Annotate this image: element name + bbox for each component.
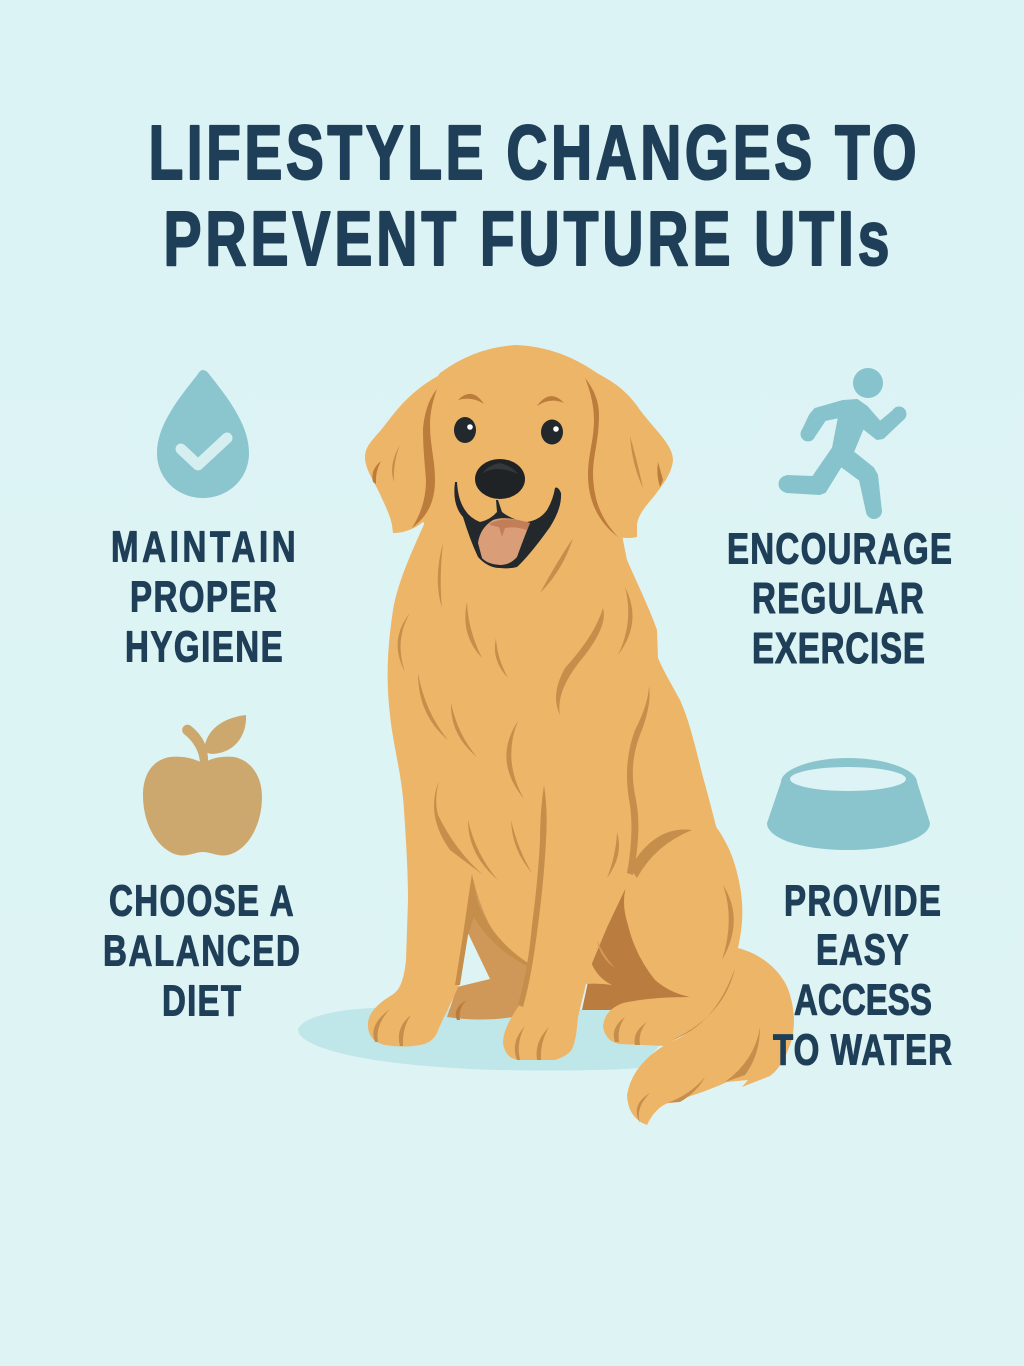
tail <box>627 948 794 1125</box>
icon: water bowl <box>767 758 930 850</box>
icon: running figure <box>778 368 906 519</box>
title <box>148 111 917 282</box>
ground shadow <box>298 1008 660 1071</box>
label: encourage regular exercise <box>727 525 952 673</box>
label: encourage regular exercise: EXERCISE <box>752 625 925 673</box>
label: provide easy access to water: EASY <box>816 926 909 975</box>
nose <box>475 459 525 499</box>
icon: water drop with check <box>157 370 249 498</box>
label: provide easy access to water: ACCESS <box>794 976 932 1025</box>
right ear <box>585 372 673 538</box>
label: choose a balanced diet <box>103 877 300 1026</box>
haunch and rear paw <box>603 818 742 1046</box>
title: PREVENT FUTURE UTIs <box>164 197 889 282</box>
label: maintain proper hygiene <box>111 523 296 672</box>
label: encourage regular exercise: REGULAR <box>752 575 924 623</box>
label: provide easy access to water <box>773 877 952 1075</box>
rear leg and belly shade <box>447 878 530 1020</box>
fur strokes <box>373 538 760 1123</box>
golden retriever illustration <box>365 345 794 1125</box>
label: choose a balanced diet: BALANCED <box>103 927 300 976</box>
eyes <box>454 417 476 443</box>
icon: apple <box>143 715 262 855</box>
left ear <box>365 375 440 533</box>
tongue <box>478 518 530 565</box>
haunch shadow <box>582 866 692 1010</box>
label: maintain proper hygiene: PROPER <box>130 573 277 622</box>
label: choose a balanced diet: CHOOSE A <box>109 877 294 926</box>
label: provide easy access to water: PROVIDE <box>784 877 941 926</box>
tuft on front leg <box>586 960 612 985</box>
label: maintain proper hygiene: MAINTAIN <box>111 523 296 572</box>
label: choose a balanced diet: DIET <box>162 977 241 1026</box>
label: maintain proper hygiene: HYGIENE <box>125 623 283 672</box>
body and front legs <box>368 522 717 1060</box>
mouth <box>454 482 561 568</box>
head <box>410 345 625 540</box>
label: encourage regular exercise: ENCOURAGE <box>727 525 952 574</box>
label: provide easy access to water: TO WATER <box>773 1026 952 1075</box>
title: LIFESTYLE CHANGES TO <box>148 111 917 196</box>
face <box>454 394 564 568</box>
eyebrows <box>458 394 484 404</box>
